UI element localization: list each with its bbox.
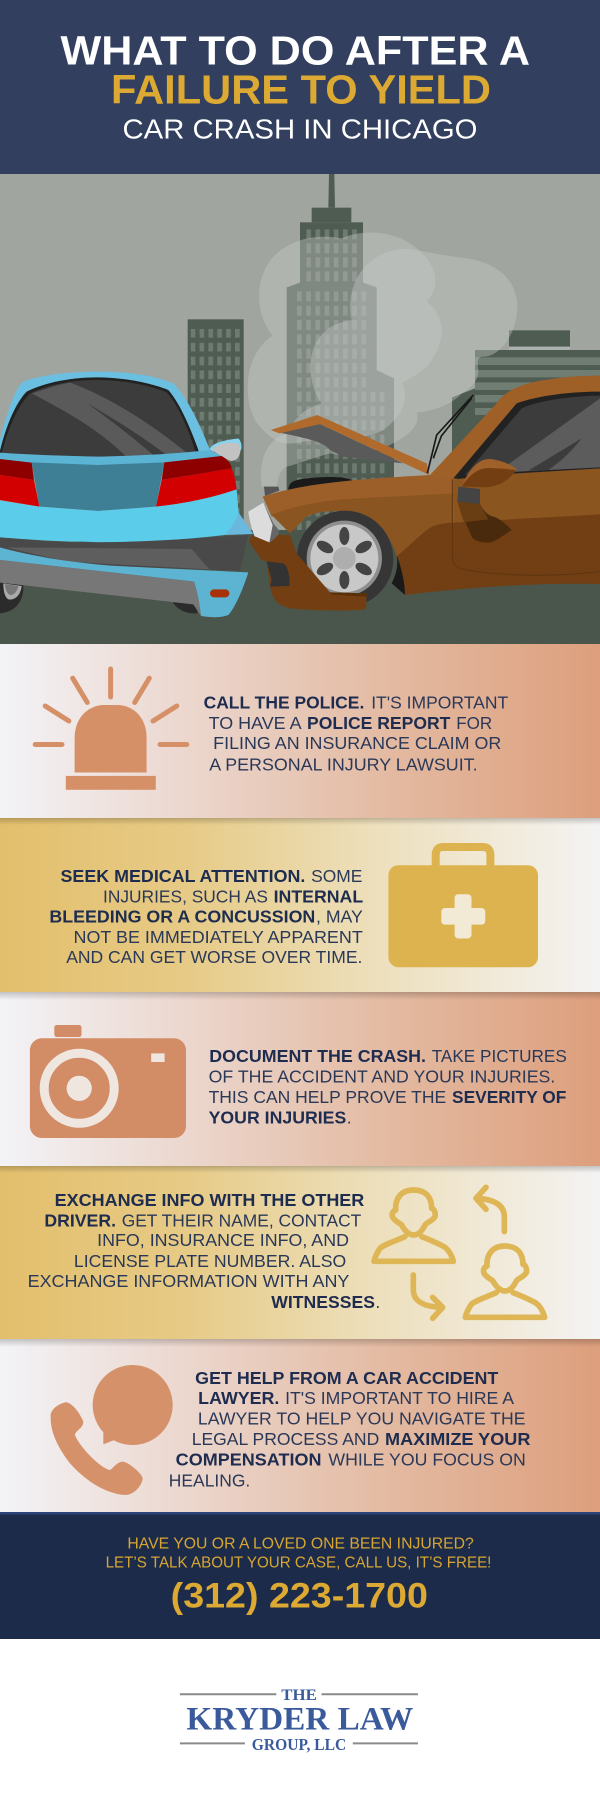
text: seek medical attention: SEEK MEDICAL ATTENTION. <box>60 866 305 886</box>
title: FAILURE TO YIELD <box>111 67 491 113</box>
logo: the kryder law group <box>180 1687 418 1754</box>
text: get help from a lawyer: LAWYER. <box>198 1388 279 1408</box>
text: document the crash: DOCUMENT THE CRASH. <box>209 1046 426 1066</box>
text: document the crash: THIS CAN HELP PROVE THE <box>209 1087 446 1107</box>
text: exchange info: INFO, INSURANCE INFO, AND <box>97 1230 349 1250</box>
text: seek medical attention: NOT BE IMMEDIATELY APPARENT <box>74 927 363 947</box>
person two <box>465 1246 545 1317</box>
text: call the police: A PERSONAL INJURY LAWSUIT. <box>209 754 478 774</box>
icon: phone and speech bubble <box>51 1365 173 1495</box>
call to action band <box>0 1512 600 1639</box>
header panel <box>0 0 600 174</box>
text: call the police: CALL THE POLICE. <box>204 692 364 712</box>
smoke <box>248 232 517 487</box>
panel: call the police <box>0 644 600 818</box>
side mirror <box>457 459 517 543</box>
text: document the crash: OF THE ACCIDENT AND YOUR INJURIES. <box>209 1066 555 1086</box>
text: exchange info: DRIVER. <box>44 1210 116 1230</box>
wiper <box>427 395 473 473</box>
body <box>263 468 600 595</box>
text: seek medical attention: INTERNAL <box>274 886 363 906</box>
text: call the police <box>204 692 508 774</box>
text: exchange info: EXCHANGE INFO WITH THE OTHER <box>55 1190 365 1210</box>
text: document the crash: . <box>347 1107 352 1127</box>
bumper <box>249 535 367 610</box>
icon: first aid kit <box>388 847 538 967</box>
icon: two people exchanging info <box>374 1187 545 1318</box>
phone number: (312) 223-1700 <box>171 1576 428 1616</box>
panel: document the crash <box>0 992 600 1166</box>
text: exchange info: WITNESSES <box>271 1292 375 1312</box>
icon: camera <box>30 1025 186 1138</box>
call to action text <box>106 1536 491 1572</box>
engine <box>264 477 352 496</box>
arrow down <box>413 1275 443 1318</box>
text: get help from a lawyer <box>169 1368 531 1491</box>
text: seek medical attention <box>49 866 363 967</box>
panel: exchange info <box>0 1166 600 1340</box>
text: exchange info <box>28 1190 380 1312</box>
text: call the police: TO HAVE A <box>209 713 302 733</box>
wheel <box>297 511 405 607</box>
logo: the kryder law group: GROUP, LLC <box>252 1735 346 1754</box>
text: get help from a lawyer: GET HELP FROM A CAR ACCIDENT <box>195 1368 499 1388</box>
text: get help from a lawyer: MAXIMIZE YOUR <box>385 1429 531 1449</box>
logo: the kryder law group: THE <box>281 1687 317 1704</box>
text: get help from a lawyer: IT'S IMPORTANT TO HIRE A <box>285 1388 514 1408</box>
call to action text: HAVE YOU OR A LOVED ONE BEEN INJURED? <box>127 1536 474 1552</box>
text: get help from a lawyer: LAWYER TO HELP YOU NAVIGATE THE <box>198 1408 526 1428</box>
text: call the police: FOR <box>456 713 492 733</box>
left car mirror <box>209 438 242 461</box>
text: get help from a lawyer: COMPENSATION <box>176 1450 322 1470</box>
arrow up <box>476 1187 504 1232</box>
title <box>60 28 530 144</box>
panel: get help from a lawyer <box>0 1339 600 1512</box>
ground <box>0 530 600 644</box>
left car reflector <box>210 589 229 597</box>
text: seek medical attention: INJURIES, SUCH AS <box>103 886 268 906</box>
roof <box>430 376 600 480</box>
text: call the police: FILING AN INSURANCE CLAIM OR <box>213 733 501 753</box>
text: call the police: POLICE REPORT <box>307 713 451 733</box>
text: document the crash <box>209 1046 567 1127</box>
text: document the crash: SEVERITY OF <box>452 1087 567 1107</box>
blue car <box>0 372 253 617</box>
call to action text: LET’S TALK ABOUT YOUR CASE, CALL US, IT’S FREE! <box>106 1555 491 1572</box>
buildings skyline <box>188 174 600 530</box>
text: document the crash: TAKE PICTURES <box>432 1046 567 1066</box>
text: exchange info: LICENSE PLATE NUMBER. ALSO <box>74 1251 346 1271</box>
text: document the crash: YOUR INJURIES <box>209 1107 347 1127</box>
headlight <box>248 503 279 543</box>
text: exchange info: EXCHANGE INFORMATION WITH ANY <box>28 1271 350 1291</box>
text: seek medical attention: , MAY <box>316 906 363 926</box>
panel: seek medical attention <box>0 818 600 992</box>
text: seek medical attention: AND CAN GET WORSE OVER TIME. <box>66 947 362 967</box>
text: get help from a lawyer: WHILE YOU FOCUS ON <box>328 1450 526 1470</box>
title: WHAT TO DO AFTER A <box>60 28 530 74</box>
text: exchange info: . <box>375 1292 380 1312</box>
text: get help from a lawyer: HEALING. <box>169 1471 250 1491</box>
text: seek medical attention: SOME <box>311 866 362 886</box>
orange car <box>248 376 600 610</box>
text: get help from a lawyer: LEGAL PROCESS AND <box>192 1429 379 1449</box>
text: call the police: IT'S IMPORTANT <box>371 692 508 712</box>
title: CAR CRASH IN CHICAGO <box>122 114 478 144</box>
window <box>453 392 600 479</box>
icon: police siren <box>35 669 187 790</box>
left car wheels <box>0 582 197 613</box>
person one <box>374 1190 453 1261</box>
text: exchange info: GET THEIR NAME, CONTACT <box>122 1210 362 1230</box>
text: seek medical attention: BLEEDING OR A CONCUSSION <box>49 906 315 926</box>
logo: the kryder law group: KRYDER LAW <box>186 1702 413 1738</box>
hood <box>271 415 429 475</box>
illustration: car crash in the city <box>0 174 600 644</box>
